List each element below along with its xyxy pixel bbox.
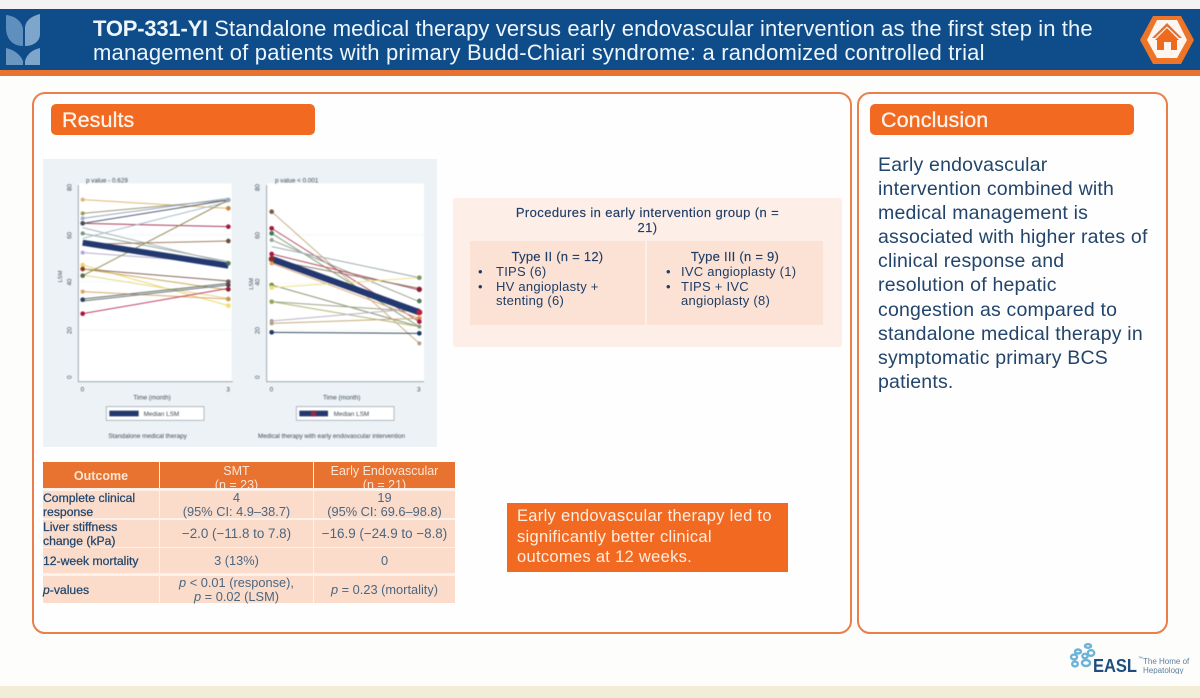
conclusion text: standalone medical therapy in xyxy=(878,323,1143,345)
chart: medical therapy with early endovascular intervention: Medical therapy with early endovascular intervention xyxy=(258,433,406,440)
callout: key finding: significantly better clinical xyxy=(517,528,712,546)
endovascular response xyxy=(314,491,455,518)
heading: results: Results xyxy=(62,108,134,132)
table header: outcome: Outcome xyxy=(74,469,128,483)
row label: liver stiffness change: Liver stiffness xyxy=(43,520,117,534)
table header: early endovascular: Early Endovascular xyxy=(331,464,438,478)
type II list xyxy=(478,264,599,308)
procedures heading: 21) xyxy=(638,220,658,235)
row label: p-values: p-values xyxy=(43,582,89,596)
SMT liver stiffness: −2.0 (−11.8 to 7.8) xyxy=(182,526,291,540)
SMT mortality: 3 (13%) xyxy=(214,552,259,568)
endovascular p-value xyxy=(314,576,455,603)
icon: tulip logo xyxy=(6,14,40,65)
type III list: TIPS + IVC xyxy=(681,279,749,294)
icon: home button xyxy=(1140,16,1194,64)
chart: medical therapy with early endovascular intervention: 60 xyxy=(255,231,262,239)
SMT response: (95% CI: 4.9–38.7) xyxy=(183,504,290,518)
conclusion text: intervention combined with xyxy=(878,178,1114,200)
row label: complete clinical response: Complete clinical xyxy=(43,490,135,504)
chart: medical therapy with early endovascular intervention: 0 xyxy=(270,387,274,394)
type III heading: Type III (n = 9) xyxy=(691,249,779,264)
top strip xyxy=(0,0,1200,9)
title: management of patients with primary Budd-Chiari syndrome: a randomized controlled trial xyxy=(93,40,985,65)
callout: key finding: Early endovascular therapy led to xyxy=(517,507,772,525)
SMT mortality xyxy=(160,548,313,573)
heading: conclusion xyxy=(870,104,1134,135)
SMT response xyxy=(160,491,313,518)
type III list xyxy=(666,264,796,308)
row label: complete clinical response: response xyxy=(43,504,93,518)
chart: standalone medical therapy xyxy=(57,177,234,440)
row label: liver stiffness change xyxy=(43,520,159,547)
chart backdrop xyxy=(43,159,437,447)
conclusion text: congestion as compared to xyxy=(878,299,1117,321)
type II list: HV angioplasty + xyxy=(496,279,599,294)
panel: procedures in early intervention group xyxy=(453,198,842,347)
endovascular response: 19 xyxy=(377,490,392,504)
chart: standalone medical therapy: 20 xyxy=(66,326,73,334)
conclusion text: resolution of hepatic xyxy=(878,274,1057,296)
endovascular p-value: p = 0.23 (mortality) xyxy=(331,582,438,596)
row label: complete clinical response xyxy=(43,491,159,518)
row label: mortality: 12-week mortality xyxy=(43,554,139,568)
endovascular response: (95% CI: 69.6–98.8) xyxy=(327,504,442,518)
SMT p-values: p = 0.02 (LSM) xyxy=(194,588,279,604)
header banner xyxy=(0,9,1200,76)
endovascular mortality: 0 xyxy=(381,552,388,568)
chart: standalone medical therapy: Standalone medical therapy xyxy=(108,433,188,440)
chart: medical therapy with early endovascular intervention: 0 xyxy=(255,375,262,379)
chart: standalone medical therapy: 3 xyxy=(226,387,230,394)
type II list: • xyxy=(478,264,483,279)
box: type III procedures xyxy=(647,241,823,325)
conclusion text: symptomatic primary BCS xyxy=(878,347,1108,369)
SMT p-values: p < 0.01 (response), xyxy=(179,574,294,590)
chart: medical therapy with early endovascular intervention: 80 xyxy=(255,183,262,191)
callout: key finding: outcomes at 12 weeks. xyxy=(517,548,692,566)
type II list: stenting (6) xyxy=(496,293,564,308)
SMT p-values xyxy=(160,576,313,603)
chart: standalone medical therapy: 60 xyxy=(66,231,73,239)
type II list: TIPS (6) xyxy=(496,264,546,279)
callout: key finding xyxy=(507,503,788,572)
chart: standalone medical therapy: 0 xyxy=(81,387,85,394)
chart: standalone medical therapy: 40 xyxy=(66,278,73,286)
conclusion text: clinical response and xyxy=(878,250,1064,272)
chart: medical therapy with early endovascular intervention: LSM xyxy=(249,278,255,290)
chart: standalone medical therapy: Time (month) xyxy=(133,395,171,402)
row label: liver stiffness change: change (kPa) xyxy=(43,534,116,548)
chart: standalone medical therapy: p value - 0.629 xyxy=(86,178,128,185)
procedures heading: Procedures in early intervention group (n = xyxy=(516,205,779,220)
procedures heading xyxy=(516,205,779,235)
table header: outcome xyxy=(43,462,159,488)
conclusion text: medical management is xyxy=(878,202,1088,224)
chart: medical therapy with early endovascular intervention: 40 xyxy=(255,278,262,286)
endovascular liver stiffness: −16.9 (−24.9 to −8.8) xyxy=(322,526,447,540)
SMT response: 4 xyxy=(233,490,240,504)
chart: medical therapy with early endovascular intervention: p value < 0.001 xyxy=(275,178,319,185)
row label: p-values xyxy=(43,576,159,603)
EASL logo: The Home of xyxy=(1143,657,1190,666)
table header: SMT: SMT xyxy=(223,464,250,478)
row label: mortality xyxy=(43,548,159,573)
title: TOP-331-YI Standalone medical therapy versus early endovascular intervention as the first step in the xyxy=(93,16,1093,41)
type II heading: Type II (n = 12) xyxy=(512,249,603,264)
bottom band xyxy=(0,686,1200,698)
conclusion text: patients. xyxy=(878,371,954,393)
heading: results xyxy=(51,104,315,135)
chart: medical therapy with early endovascular intervention: 3 xyxy=(417,387,421,394)
chart: medical therapy with early endovascular intervention: 20 xyxy=(255,326,262,334)
outcomes table xyxy=(43,462,455,603)
title xyxy=(93,16,1093,65)
conclusion text: Early endovascular xyxy=(878,154,1047,176)
chart: standalone medical therapy: 80 xyxy=(66,183,73,191)
table header: SMT xyxy=(160,462,313,488)
panel: results xyxy=(32,92,852,634)
panel: conclusion xyxy=(857,92,1168,634)
conclusion text: associated with higher rates of xyxy=(878,226,1148,248)
chart: medical therapy with early endovascular intervention: Time (month) xyxy=(323,394,360,401)
type III list: • xyxy=(666,264,671,279)
type III list: • xyxy=(666,279,671,294)
heading: conclusion: Conclusion xyxy=(881,108,988,132)
box: type II procedures xyxy=(470,241,645,325)
chart: medical therapy with early endovascular intervention: Median LSM xyxy=(334,411,369,418)
EASL logo: ™ xyxy=(1138,656,1143,662)
endovascular mortality xyxy=(314,548,455,573)
endovascular liver stiffness xyxy=(314,520,455,547)
chart: standalone medical therapy: LSM xyxy=(58,270,64,282)
EASL logo xyxy=(1070,643,1190,674)
conclusion text xyxy=(878,154,1148,393)
chart: standalone medical therapy: 0 xyxy=(66,375,73,379)
SMT liver stiffness xyxy=(160,520,313,547)
chart: standalone medical therapy: Median LSM xyxy=(144,411,179,418)
chart: medical therapy with early endovascular intervention xyxy=(248,177,424,440)
type III list: IVC angioplasty (1) xyxy=(681,264,796,279)
type III list: angioplasty (8) xyxy=(681,293,770,308)
table header: early endovascular xyxy=(314,462,455,488)
type II list: • xyxy=(478,279,483,294)
